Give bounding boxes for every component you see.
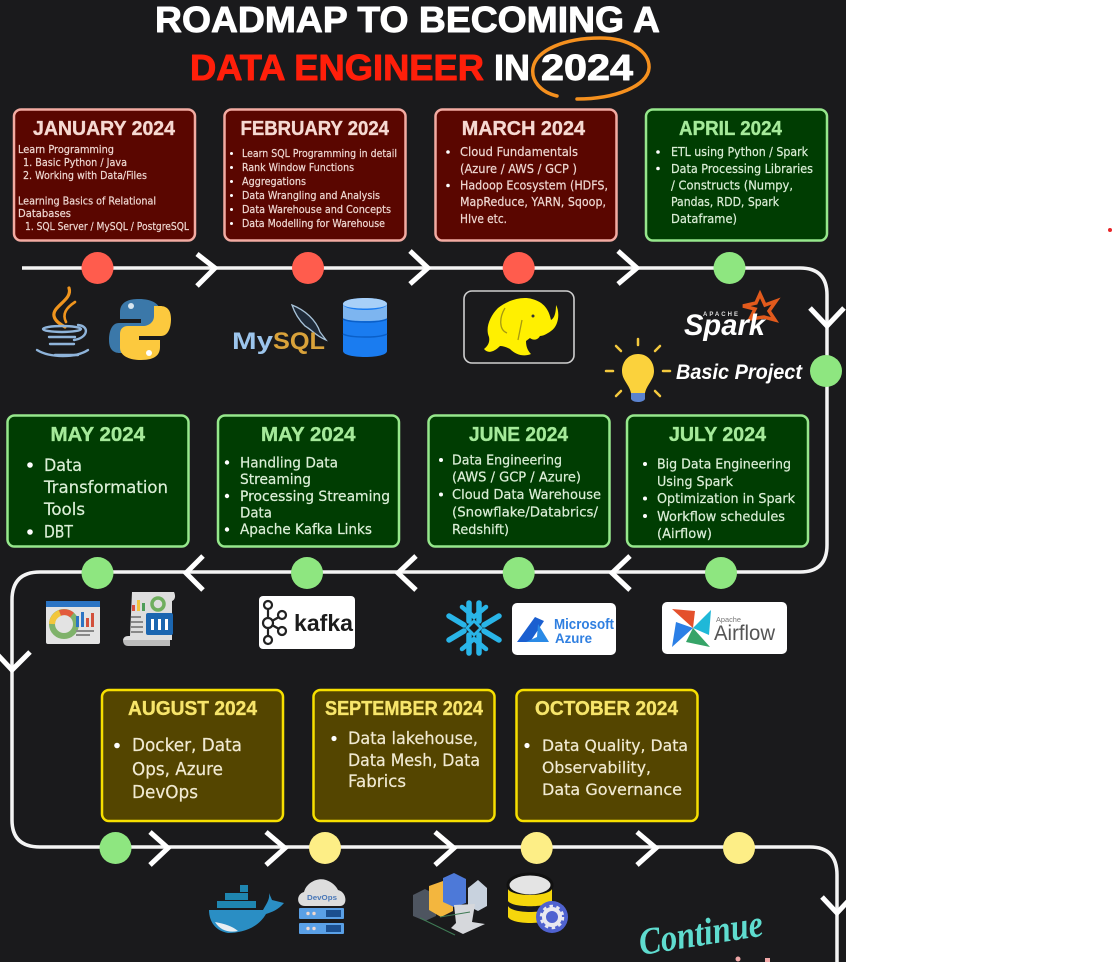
card: September 2024: Data Mesh, Data — [348, 751, 480, 770]
card: February 2024: FEBRUARY 2024 — [240, 118, 390, 140]
icon: apache spark — [684, 294, 776, 342]
card: August 2024: AUGUST 2024 — [128, 698, 258, 720]
card: July 2024: Optimization in Spark — [657, 491, 795, 507]
card: March 2024: Hadoop Ecosystem (HDFS, — [460, 178, 608, 192]
icon: python — [109, 299, 171, 360]
card: April 2024: ETL using Python / Spark — [671, 144, 809, 159]
card: February 2024: Aggregations — [242, 176, 306, 188]
card: March 2024 — [436, 110, 616, 240]
card: October 2024 — [516, 690, 698, 821]
title: DATA ENGINEER — [190, 47, 484, 88]
icon: microsoft azure: Microsoft — [554, 617, 614, 633]
card: May 2024 (transformation): Tools — [43, 500, 85, 520]
card: January 2024: Learning Basics of Relational — [18, 194, 156, 208]
icon: mysql logo: My — [232, 328, 274, 355]
card: February 2024: Data Wrangling and Analysis — [242, 190, 380, 202]
card: June 2024: Cloud Data Warehouse — [452, 487, 601, 503]
icon: mysql logo — [232, 305, 326, 355]
icon: docker whale — [209, 885, 284, 933]
card: May 2024 (transformation): Data — [44, 456, 82, 476]
icon: dashboard — [46, 601, 100, 644]
card: October 2024: OCTOBER 2024 — [535, 698, 679, 720]
card: September 2024: Fabrics — [348, 772, 406, 791]
card: June 2024: (AWS / GCP / Azure) — [452, 470, 581, 486]
card: May 2024 (streaming): Processing Streaming — [240, 489, 390, 505]
card: May 2024 (streaming): Apache Kafka Links — [240, 522, 372, 538]
card: April 2024: Data Processing Libraries — [671, 161, 813, 176]
card: May 2024 (streaming): Handling Data — [240, 456, 338, 472]
card: October 2024: Data Governance — [542, 780, 682, 799]
title: ROADMAP TO BECOMING A — [155, 0, 660, 40]
card: July 2024: Workflow schedules — [657, 509, 785, 525]
icon: hadoop elephant in box — [464, 291, 574, 363]
card: July 2024: JULY 2024 — [669, 424, 767, 446]
card: August 2024: Docker, Data — [132, 736, 242, 756]
card: February 2024 — [224, 110, 406, 240]
card: July 2024: Big Data Engineering — [657, 456, 791, 472]
stray red dot — [1108, 228, 1112, 232]
card: March 2024: MapReduce, YARN, Sqoop, — [460, 194, 606, 209]
card: February 2024: Rank Window Functions — [242, 162, 354, 174]
card: June 2024: JUNE 2024 — [469, 424, 569, 446]
card: June 2024: (Snowflake/Databrics/ — [452, 504, 598, 520]
card: March 2024: Cloud Fundamentals — [460, 144, 578, 159]
card: August 2024: DevOps — [132, 783, 198, 803]
icon: apache spark: APACHE — [703, 312, 738, 318]
card: January 2024: 2. Working with Data/Files — [23, 169, 147, 182]
icon: apache airflow — [662, 602, 787, 654]
title: IN — [494, 47, 530, 88]
icon: light bulb — [606, 339, 670, 402]
card: April 2024: Dataframe) — [671, 211, 737, 226]
icon: report scroll — [123, 592, 175, 646]
icon: devops cloud servers — [298, 879, 345, 934]
card: February 2024: Data Warehouse and Concepts — [242, 204, 391, 216]
icon: apache airflow: Apache — [716, 617, 741, 624]
card: May 2024 (streaming): Streaming — [240, 472, 311, 488]
card: January 2024 — [14, 110, 195, 240]
card: July 2024: Using Spark — [657, 474, 733, 490]
icon: mysql logo: SQL — [273, 328, 325, 355]
card: April 2024: / Constructs (Numpy, — [671, 178, 793, 192]
card: May 2024 (streaming): MAY 2024 — [261, 424, 356, 446]
card: May 2024 (transformation): MAY 2024 — [50, 424, 146, 446]
card: January 2024: 1. Basic Python / Java — [23, 156, 127, 169]
card: May 2024 (transformation) — [8, 416, 188, 546]
icon: java — [37, 288, 88, 356]
partial pink lettering — [736, 956, 770, 962]
icon: kafka logo — [259, 596, 355, 649]
card: February 2024: Learn SQL Programming in detail — [242, 148, 397, 160]
icon: microsoft azure: Azure — [555, 630, 592, 646]
title — [155, 0, 660, 99]
card: January 2024: JANUARY 2024 — [33, 118, 176, 140]
icon: database with gear — [508, 874, 568, 933]
timeline dots — [82, 252, 842, 864]
icon: snowflake — [449, 603, 499, 653]
card: September 2024 — [314, 690, 494, 821]
icon: apache spark: Spark — [684, 309, 766, 342]
dark poster background — [0, 0, 846, 962]
card: July 2024: (Airflow) — [657, 526, 712, 542]
icon: kafka logo: kafka — [294, 610, 353, 636]
card: February 2024: Data Modelling for Warehouse — [242, 218, 385, 230]
card: May 2024 (streaming): Data — [240, 506, 272, 522]
title: 2024 — [541, 47, 633, 88]
card: April 2024 — [646, 110, 827, 240]
icon: apache airflow: Airflow — [714, 622, 776, 645]
card: March 2024: (Azure / AWS / GCP ) — [460, 161, 577, 176]
card: June 2024 — [428, 416, 610, 546]
card: August 2024: Ops, Azure — [132, 760, 223, 780]
card: June 2024: Redshift) — [452, 522, 509, 538]
card: January 2024: Learn Programming — [18, 143, 114, 156]
label: basic project: Basic Project — [676, 361, 803, 384]
card: May 2024 (transformation): Transformation — [43, 478, 168, 498]
card: August 2024 — [102, 690, 283, 821]
timeline path — [0, 251, 852, 962]
card: May 2024 (transformation): DBT — [44, 522, 74, 542]
card: June 2024: Data Engineering — [452, 452, 562, 468]
card: January 2024: Databases — [18, 207, 71, 220]
icon: microsoft azure — [512, 603, 616, 655]
card: October 2024: Data Quality, Data — [542, 736, 688, 755]
card: April 2024: Pandas, RDD, Spark — [671, 194, 780, 209]
card: October 2024: Observability, — [542, 758, 651, 777]
card: May 2024 (streaming) — [218, 416, 399, 546]
icon: isometric servers and laptop — [413, 873, 487, 935]
label: continue: Continue — [636, 903, 766, 962]
card: September 2024: SEPTEMBER 2024 — [325, 698, 484, 720]
icon: database — [343, 298, 387, 357]
card: January 2024: 1. SQL Server / MySQL / PostgreSQL — [25, 220, 190, 233]
card: September 2024: Data lakehouse, — [348, 729, 478, 748]
card: April 2024: APRIL 2024 — [679, 118, 783, 140]
card: March 2024: HIve etc. — [460, 211, 507, 226]
card: July 2024 — [627, 416, 808, 546]
icon: devops cloud servers: DevOps — [307, 893, 337, 902]
card: March 2024: MARCH 2024 — [462, 118, 586, 140]
